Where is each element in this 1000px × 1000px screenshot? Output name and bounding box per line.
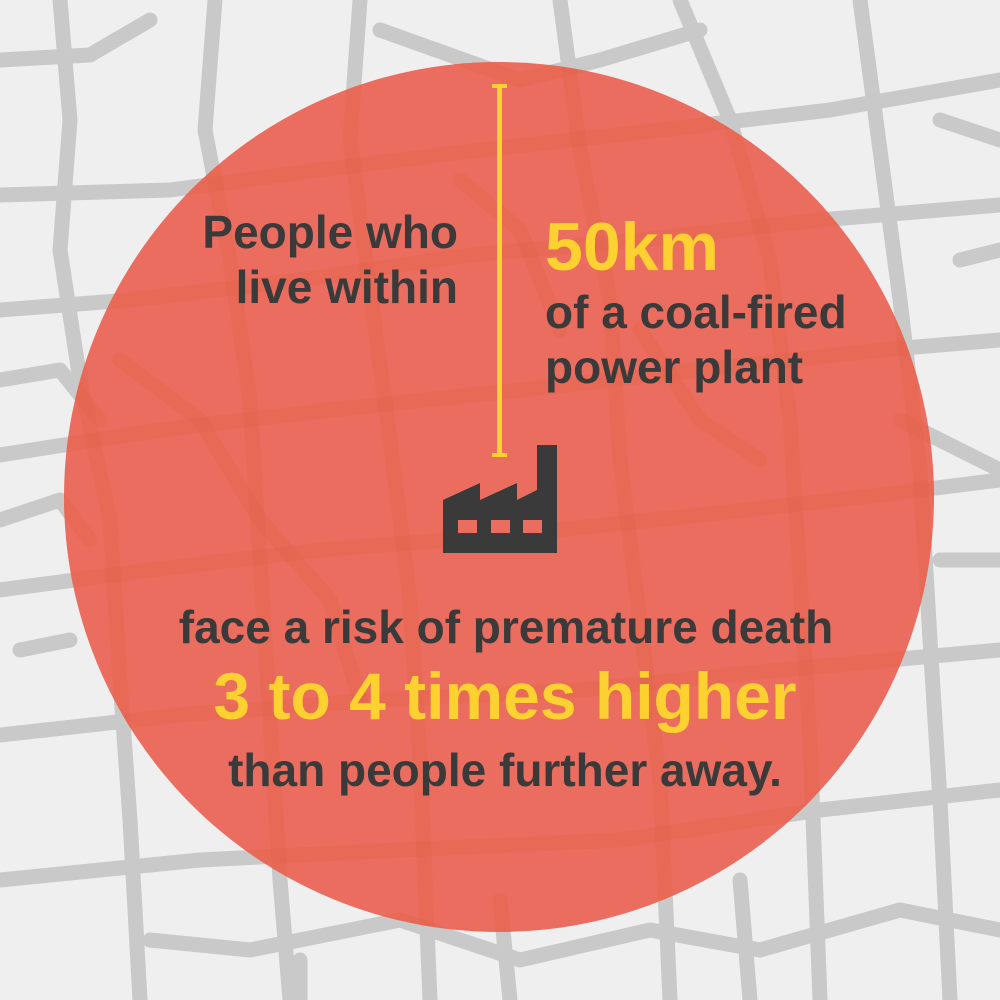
- text: of a coal-fired power plant: of a coal-fired: [545, 286, 847, 338]
- text: 50km: 50km: [545, 209, 719, 285]
- text: people who live within: live within: [236, 261, 458, 313]
- text: people who live within: People who: [202, 206, 458, 258]
- text: than people further away: than people further away.: [228, 744, 782, 796]
- text: 3 to 4 times higher: 3 to 4 times higher: [213, 659, 797, 733]
- text: of a coal-fired power plant: [545, 286, 847, 393]
- text: face a risk: face a risk of premature death: [179, 601, 833, 653]
- text: of a coal-fired power plant: power plant: [545, 341, 803, 393]
- text: people who live within: [202, 206, 458, 313]
- red radius circle: [64, 62, 934, 932]
